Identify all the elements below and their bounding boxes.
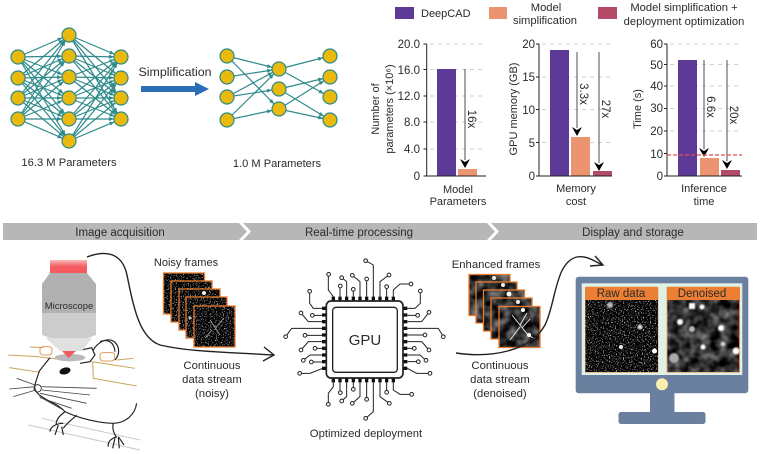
- panel: network simplification: [11, 28, 337, 170]
- label: continuous noisy data stream: [182, 360, 242, 400]
- legend: deployment optimization: [624, 16, 744, 28]
- icon: microscope: Microscope: [45, 301, 93, 312]
- chart: inference time: 20: [650, 126, 663, 138]
- arrow: noisy data stream: [87, 253, 274, 361]
- icon: GPU chip: [284, 259, 445, 420]
- chart: model parameters: Number of: [370, 82, 382, 135]
- chart: model parameters: 16.0: [398, 65, 420, 77]
- chart: inference time: 0: [657, 171, 663, 183]
- threshold line: [667, 154, 742, 156]
- noisy frames: [154, 257, 235, 347]
- chart: model parameters: 8.0: [404, 117, 420, 129]
- chart: model parameters: 20.0: [398, 39, 420, 51]
- chart: inference time: 50: [650, 60, 663, 72]
- chart: model parameters: [370, 39, 487, 208]
- icon: microscope: [42, 260, 96, 358]
- pipeline banner: Display and storage: [582, 227, 684, 239]
- chart: inference time: 6.6x: [704, 96, 716, 118]
- panel: raw data: Raw data: [597, 288, 646, 300]
- label: continuous denoised data stream: [470, 360, 530, 400]
- legend: [395, 2, 744, 28]
- chart: model parameters: Model: [443, 184, 473, 196]
- enhanced frames: Enhanced frames: [452, 259, 541, 271]
- chart: memory cost: 15: [522, 72, 535, 84]
- pipeline banner: [3, 223, 757, 240]
- panel: denoised: [667, 287, 740, 372]
- label: continuous denoised data stream: data stream: [470, 374, 530, 386]
- chart: memory cost: cost: [566, 196, 586, 208]
- label: continuous noisy data stream: (noisy): [195, 388, 229, 400]
- icon: GPU chip: GPU: [349, 332, 381, 349]
- chart: memory cost: GPU memory (GB): [508, 63, 520, 155]
- chart: model parameters: Parameters: [430, 196, 487, 208]
- chart: inference time: [632, 39, 742, 208]
- illustration: mouse under microscope: [8, 340, 140, 450]
- chart: inference time: 40: [650, 81, 663, 93]
- label: 1.0 M parameters: 1.0 M Parameters: [233, 158, 322, 170]
- label: 16.3 M parameters: 16.3 M Parameters: [21, 157, 117, 169]
- chart: inference time: 60: [650, 39, 663, 51]
- chart: memory cost: 20: [522, 39, 535, 51]
- chart: memory cost: Memory: [556, 183, 596, 195]
- chart: model parameters: 4.0: [404, 144, 420, 156]
- chart: inference time: time: [694, 196, 714, 208]
- enhanced frames: [452, 259, 541, 348]
- label: optimized deployment: Optimized deployment: [310, 428, 423, 440]
- neural network: 16.3 M parameters: [11, 28, 128, 148]
- label: continuous noisy data stream: data stream: [182, 374, 242, 386]
- panel: raw data: [585, 287, 658, 372]
- chart: inference time: 10: [650, 149, 663, 161]
- chart: inference time: Inference: [681, 183, 727, 195]
- chart: memory cost: 0: [529, 171, 535, 183]
- chart: inference time: Time (s): [632, 89, 644, 129]
- chart: model parameters: parameters (×10⁶): [384, 64, 396, 154]
- chart: memory cost: 10: [522, 105, 535, 117]
- chart: inference time: 30: [650, 103, 663, 115]
- chart: model parameters: 12.0: [398, 91, 420, 103]
- noisy frames: Noisy frames: [154, 257, 219, 269]
- label: continuous denoised data stream: Continuous: [471, 360, 529, 372]
- legend: Model simplification +: [630, 2, 738, 14]
- chart: model parameters: 16x: [465, 110, 477, 129]
- neural network: 1.0 M parameters: [220, 49, 337, 127]
- chart: memory cost: [508, 39, 612, 208]
- panel: denoised: Denoised: [678, 288, 726, 300]
- arrow: denoised data stream: [456, 256, 603, 355]
- chart: memory cost: 27x: [599, 100, 611, 119]
- chart: inference time: 20x: [727, 106, 739, 125]
- chart: memory cost: 5: [529, 138, 535, 150]
- pipeline banner: Real-time processing: [305, 227, 413, 239]
- chart: model parameters: 0: [414, 171, 420, 183]
- pipeline banner: Image acquisition: [75, 227, 165, 239]
- arrow: simplification: [141, 82, 209, 96]
- chart: memory cost: 3.3x: [577, 83, 589, 105]
- label: simplification: Simplification: [138, 65, 212, 79]
- icon: monitor: [576, 277, 748, 424]
- legend: simplification: [513, 15, 577, 27]
- label: continuous noisy data stream: Continuous: [183, 360, 241, 372]
- legend: Model: [531, 2, 561, 14]
- legend: DeepCAD: [421, 8, 471, 20]
- label: continuous denoised data stream: (denoised): [473, 388, 527, 400]
